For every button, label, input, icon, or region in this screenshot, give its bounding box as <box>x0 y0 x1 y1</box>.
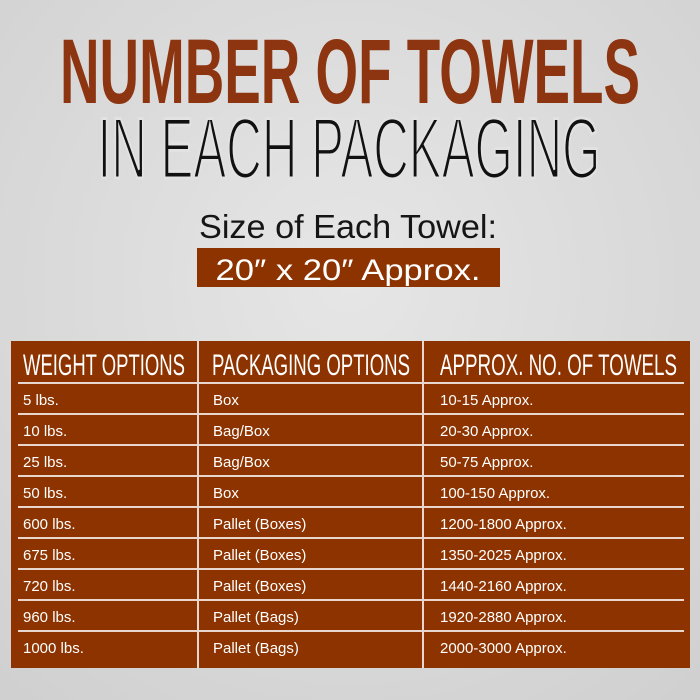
table rows: 1920-2880 Approx. <box>440 609 567 626</box>
table rows: Pallet (Bags) <box>213 640 299 657</box>
table rows: 1000 lbs. <box>23 640 84 657</box>
table rows: Pallet (Bags) <box>213 609 299 626</box>
table rows: Pallet (Boxes) <box>213 578 306 595</box>
table rows: 10 lbs. <box>23 423 67 440</box>
title <box>60 21 640 197</box>
table rows: Pallet (Boxes) <box>213 516 306 533</box>
table header <box>23 349 677 382</box>
table rows: Box <box>213 392 239 409</box>
table rows: 50-75 Approx. <box>440 454 533 471</box>
table header: PACKAGING OPTIONS <box>212 349 410 382</box>
table rows: 720 lbs. <box>23 578 76 595</box>
table rows: 2000-3000 Approx. <box>440 640 567 657</box>
table rows: 600 lbs. <box>23 516 76 533</box>
table rows: Bag/Box <box>213 454 270 471</box>
table rows: 25 lbs. <box>23 454 67 471</box>
table header: WEIGHT OPTIONS <box>23 349 185 382</box>
table rows: 5 lbs. <box>23 392 59 409</box>
table rows: 10-15 Approx. <box>440 392 533 409</box>
table rows: Box <box>213 485 239 502</box>
table rows: 50 lbs. <box>23 485 67 502</box>
table rows: 100-150 Approx. <box>440 485 550 502</box>
table rows: 20-30 Approx. <box>440 423 533 440</box>
table rows: Pallet (Boxes) <box>213 547 306 564</box>
table <box>11 341 690 668</box>
size badge <box>197 248 500 287</box>
table rows: 1440-2160 Approx. <box>440 578 567 595</box>
subtitle: size of each towel: Size of Each Towel: <box>199 208 497 245</box>
table rows <box>23 392 567 657</box>
table rows: 675 lbs. <box>23 547 76 564</box>
table rows: 960 lbs. <box>23 609 76 626</box>
table rows: Bag/Box <box>213 423 270 440</box>
size badge: 20″ x 20″ Approx. <box>216 254 480 287</box>
table rows: 1200-1800 Approx. <box>440 516 567 533</box>
table rows: 1350-2025 Approx. <box>440 547 567 564</box>
